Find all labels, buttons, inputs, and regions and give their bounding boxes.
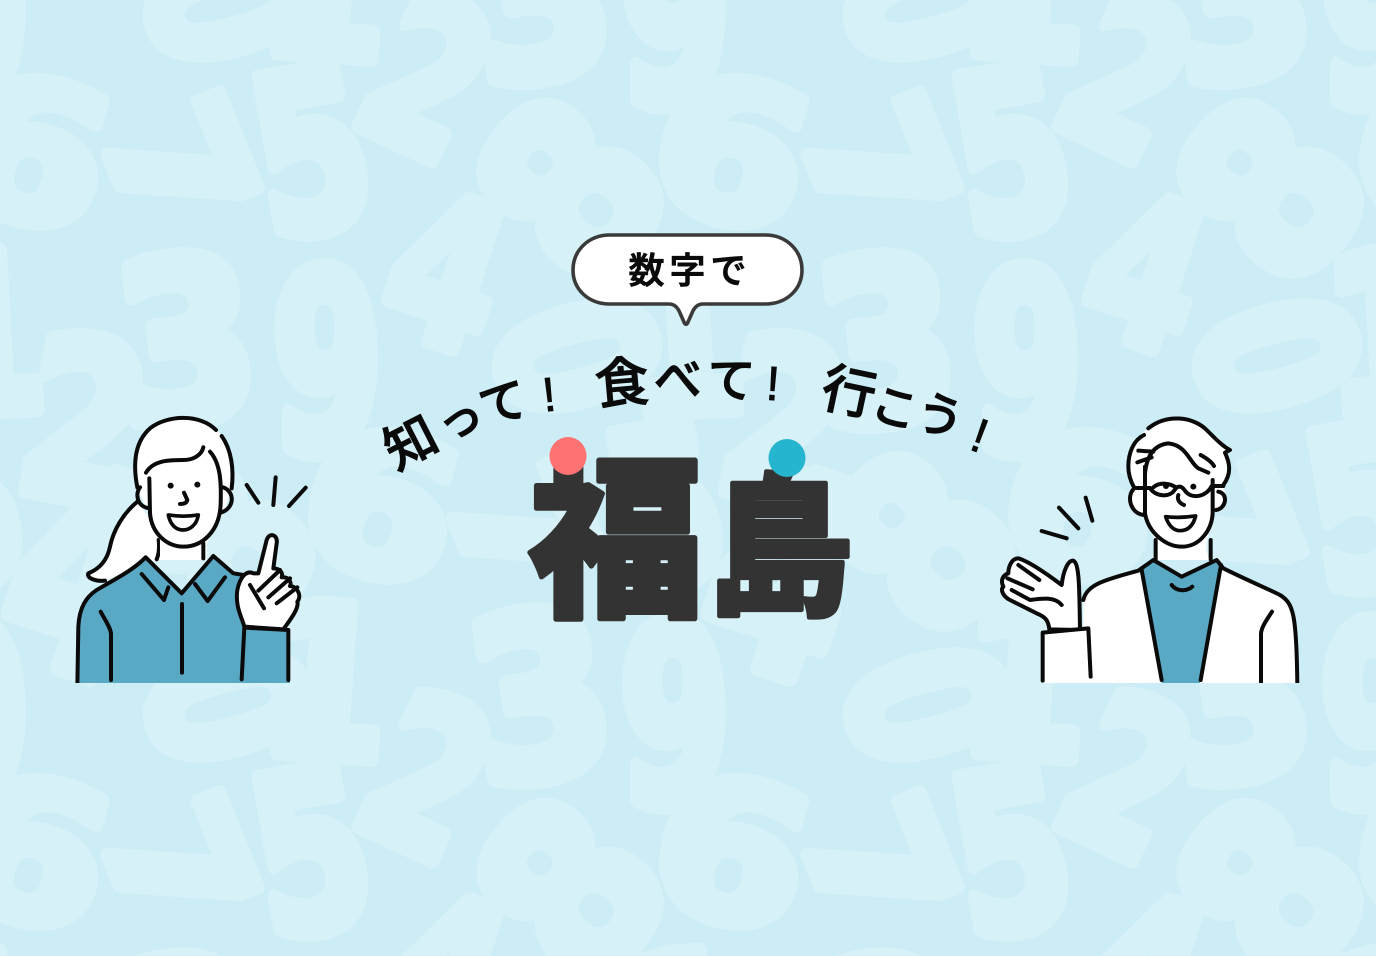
man head: [1128, 418, 1230, 560]
slogan arc: 知って!食べて!行こう!: [375, 352, 995, 482]
slogan arc: 知って!食べて!行こう!: て: [705, 353, 757, 410]
illustration: man in lab coat: [1002, 418, 1297, 687]
slogan arc: 知って!食べて!行こう!: !: [964, 409, 995, 464]
woman shirt: [77, 556, 290, 687]
sparkle lines: [1042, 498, 1092, 538]
slogan arc: 知って!食べて!行こう!: う: [909, 385, 971, 450]
slogan arc: 知って!食べて!行こう!: 食: [593, 352, 652, 416]
speech bubble: 数字で: 数字で: [628, 250, 752, 291]
slogan arc: 知って!食べて!行こう!: っ: [429, 387, 491, 451]
illustration: woman pointing: [77, 418, 306, 687]
logo teal dot: [768, 439, 806, 477]
man hand and sleeve: [1002, 558, 1091, 683]
sparkle lines: [247, 477, 306, 506]
slogan arc: 知って!食べて!行こう!: こ: [866, 377, 924, 439]
logo title: 福島: 島: [708, 464, 853, 636]
logo pink dot: [550, 437, 586, 475]
woman hair and face: [135, 418, 232, 560]
woman hand: [237, 535, 299, 680]
slogan arc: 知って!食べて!行こう!: べ: [653, 353, 703, 408]
slogan arc: 知って!食べて!行こう!: !: [764, 358, 781, 411]
slogan arc: 知って!食べて!行こう!: 知: [375, 406, 448, 482]
slogan arc: 知って!食べて!行こう!: て: [474, 373, 533, 436]
slogan arc: 知って!食べて!行こう!: 行: [816, 358, 881, 428]
slogan arc: 知って!食べて!行こう!: !: [540, 368, 559, 423]
speech bubble: 数字で: [573, 235, 802, 324]
logo title: 福島: 福: [528, 446, 704, 640]
man coat: [1083, 560, 1297, 687]
logo title: 福島: [528, 437, 853, 640]
woman ponytail: [88, 502, 160, 581]
